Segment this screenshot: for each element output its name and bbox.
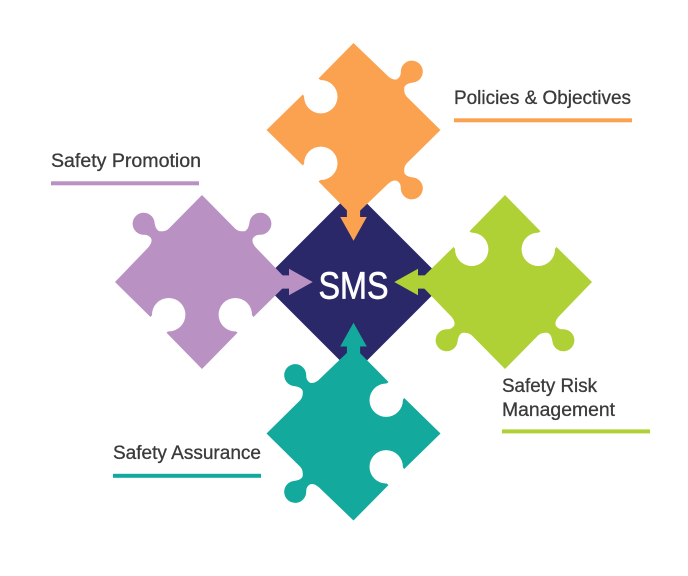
label: Safety Promotion [51, 151, 201, 185]
puzzle piece: Safety Risk Management (green) with arrow [394, 195, 592, 369]
label: Safety Risk Management: Management [502, 400, 616, 421]
label: Safety Promotion: Safety Promotion [51, 151, 201, 172]
label: Policies & Objectives [454, 88, 632, 122]
label: Safety Assurance: Safety Assurance [113, 443, 261, 464]
label: Safety Risk Management [502, 376, 650, 433]
central SMS diamond [262, 190, 446, 374]
label: Safety Risk Management: Safety Risk [502, 376, 597, 397]
puzzle piece: Safety Assurance (teal) with arrow [266, 323, 440, 520]
puzzle piece: Policies & Objectives (orange) with arrow [266, 43, 440, 241]
label: Safety Assurance [113, 443, 261, 478]
SMS heading: SMS [318, 266, 388, 308]
label: Policies & Objectives: Policies & Objectives [454, 88, 631, 109]
puzzle piece: Safety Promotion (purple) with arrow [115, 195, 313, 369]
